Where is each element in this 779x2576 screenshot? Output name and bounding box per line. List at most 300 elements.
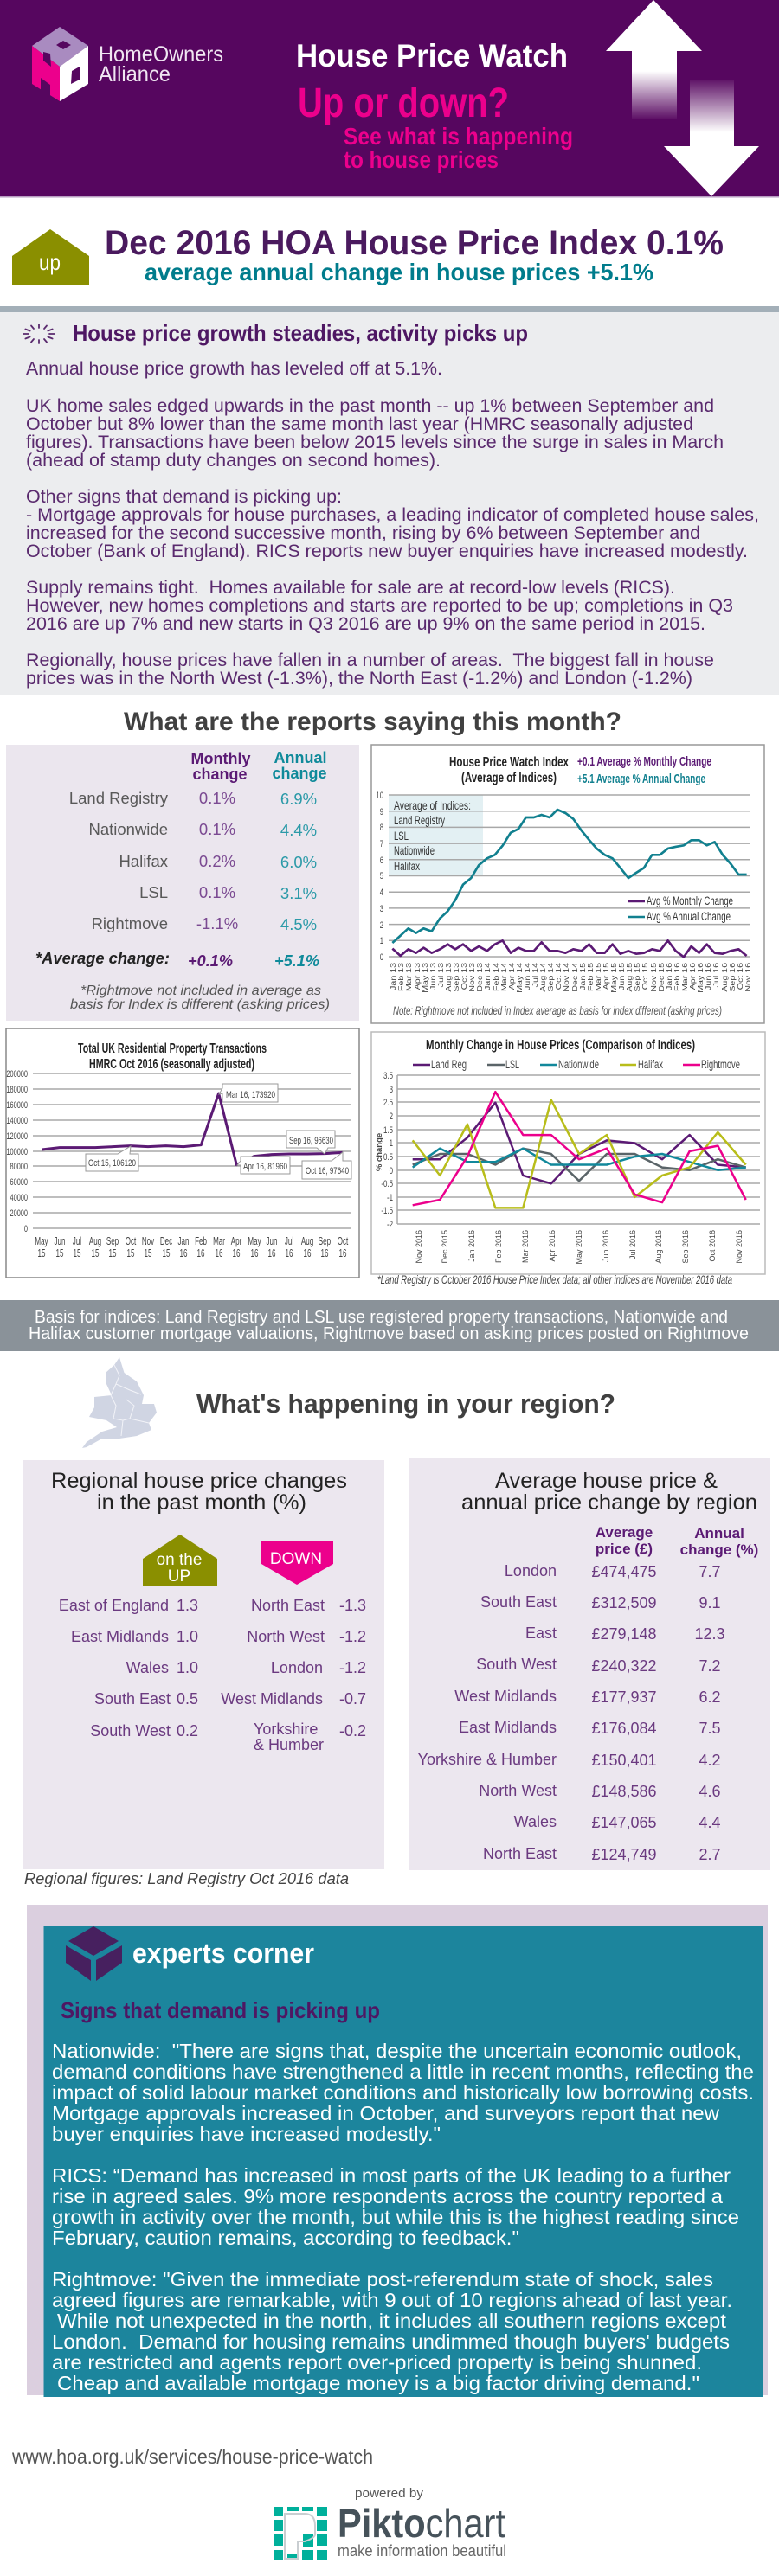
panel title: Average house price & xyxy=(495,1469,718,1493)
panel title xyxy=(51,1469,347,1515)
indices list: LSL xyxy=(394,829,409,843)
legend: Nationwide xyxy=(558,1058,599,1071)
indices list: Halifax xyxy=(394,859,420,873)
panel: summary xyxy=(0,312,779,695)
quote: Rightmove: Cheap and available mortgage money is a big factor driving demand." xyxy=(57,2372,699,2394)
x axis labels: Jul xyxy=(285,1235,293,1248)
x axis labels: Feb 2016 xyxy=(494,1230,503,1263)
chart title: House Price Watch Index xyxy=(449,755,569,770)
y axis title: % change xyxy=(375,1133,384,1171)
average prices: £124,749 xyxy=(591,1846,657,1863)
header banner xyxy=(0,0,779,197)
chart title xyxy=(449,755,569,785)
logo wordmark: HomeOwners xyxy=(99,42,223,67)
x axis labels: 15 xyxy=(163,1247,170,1260)
quote: RICS: growth in activity over the month, but while this is the highest reading since xyxy=(52,2206,739,2228)
x axis labels: 16 xyxy=(286,1247,293,1260)
banner subheading: to house prices xyxy=(344,146,499,173)
chart: House Price Watch Index xyxy=(371,745,764,1023)
y axis labels: 100000 xyxy=(6,1147,28,1157)
average row: *Average change: xyxy=(35,950,170,967)
callout: Mar 16: Mar 16, 173920 xyxy=(226,1090,275,1100)
x axis labels: Sep 2016 xyxy=(681,1230,690,1264)
average row xyxy=(35,950,319,970)
x axis labels: 15 xyxy=(145,1247,151,1260)
risers list: East of England xyxy=(59,1597,169,1614)
x axis labels xyxy=(35,1235,348,1260)
x axis labels: 15 xyxy=(38,1247,45,1260)
y axis labels: 120000 xyxy=(6,1131,28,1141)
logo wordmark xyxy=(99,42,223,87)
x axis labels: Jun 14 xyxy=(524,962,532,990)
x axis labels: Nov 2016 xyxy=(735,1230,744,1264)
headline index block xyxy=(12,224,724,285)
callout: Apr 16: Apr 16, 81960 xyxy=(243,1162,287,1172)
y axis labels: -0.5 xyxy=(381,1179,393,1189)
icon: up house: up xyxy=(39,249,61,275)
summary text: However, new homes completions and starts are reported to be up; completions in Q3 xyxy=(26,595,733,616)
band: basis for indices: Halifax customer mortgage valuations, Rightmove based on asking prices posted on Rightmove xyxy=(29,1323,749,1343)
x axis labels: Oct xyxy=(338,1235,348,1248)
y axis labels: 8 xyxy=(380,823,383,833)
arrow: down xyxy=(664,80,759,196)
y axis labels: 10 xyxy=(376,791,383,801)
legend: Land Reg xyxy=(431,1058,467,1071)
quote: Nationwide: Nationwide: "There are signs that, despite the uncertain economic outlook, xyxy=(52,2040,742,2062)
icon: HomeOwners Alliance logo cube xyxy=(32,27,88,101)
y axis labels: 4 xyxy=(380,888,383,898)
callout: Oct 15: Oct 15, 106120 xyxy=(88,1158,136,1169)
icon: up house xyxy=(12,229,89,285)
summary text: UK home sales edged upwards in the past month -- up 1% between September and xyxy=(26,395,714,416)
summary text: figures). Transactions have been below 2015 levels since the surge in sales in March xyxy=(26,432,724,452)
column headers: change (%) xyxy=(680,1541,758,1558)
callout: Apr 16 xyxy=(237,1157,290,1174)
x axis labels: May 16 xyxy=(697,963,705,993)
callout: Mar 16 xyxy=(219,1084,278,1102)
y axis labels: 200000 xyxy=(6,1069,28,1079)
y axis labels: -1 xyxy=(387,1193,393,1203)
banner title: House Price Watch xyxy=(296,38,568,74)
y axis labels: 3 xyxy=(380,904,383,914)
average row: +0.1% xyxy=(188,952,233,970)
x axis labels: May 13 xyxy=(422,963,430,993)
average row: +5.1% xyxy=(274,952,319,970)
y axis labels: 80000 xyxy=(10,1162,28,1171)
legend: Halifax xyxy=(638,1058,663,1071)
average prices xyxy=(591,1563,657,1863)
x axis labels: Sep 13 xyxy=(453,963,461,992)
x axis labels: 15 xyxy=(126,1247,134,1260)
annual changes: 12.3 xyxy=(694,1625,725,1643)
index title: Dec 2016 HOA House Price Index 0.1% xyxy=(105,224,724,262)
row labels: Rightmove xyxy=(92,914,168,932)
monthly values: 0.1% xyxy=(199,883,235,901)
x axis labels: Apr 14 xyxy=(508,962,517,990)
y axis labels: 60000 xyxy=(10,1177,28,1187)
panel title: in the past month (%) xyxy=(97,1490,306,1515)
x axis labels: Dec 14 xyxy=(571,962,580,992)
x axis labels: Aug xyxy=(301,1235,313,1248)
arrow: up xyxy=(606,0,702,119)
y axis labels: 0 xyxy=(380,952,383,963)
callout: Oct 16 xyxy=(302,1152,351,1179)
summary text: (ahead of stamp duty changes on second homes). xyxy=(26,450,441,471)
x axis labels: 15 xyxy=(73,1247,80,1260)
x axis labels: Nov 2016 xyxy=(415,1230,423,1264)
footer: Piktochart credit xyxy=(274,2486,506,2560)
x axis labels: Mar xyxy=(213,1235,225,1248)
average prices: £312,509 xyxy=(591,1594,657,1612)
icon: on the up house: on the xyxy=(157,1551,202,1569)
x axis labels: Aug xyxy=(89,1235,101,1248)
y axis labels xyxy=(6,1069,28,1234)
y axis labels: 2 xyxy=(380,920,383,931)
x axis labels: May xyxy=(35,1235,48,1248)
x axis labels: Aug 15 xyxy=(626,963,634,992)
x axis labels: Mar 16 xyxy=(681,963,690,991)
summary text: - Mortgage approvals for house purchases, a leading indicator of completed house sales, xyxy=(26,504,759,525)
quote: Nationwide: Mortgage approvals increased in October, and surveyors report that new xyxy=(52,2102,720,2124)
fallers list: -1.2 xyxy=(339,1628,366,1645)
fallers list xyxy=(221,1597,366,1753)
annual changes: 4.2 xyxy=(699,1752,721,1769)
y axis labels: 1 xyxy=(390,1138,393,1149)
annual change subtitle: average annual change in house prices +5.1% xyxy=(145,259,653,285)
region names: North West xyxy=(479,1782,557,1799)
risers list: Wales xyxy=(126,1659,169,1676)
section heading: reports: What are the reports saying this month? xyxy=(124,708,621,736)
risers list: East Midlands xyxy=(71,1628,169,1645)
x axis labels: 16 xyxy=(197,1247,204,1260)
experts heading: experts corner xyxy=(132,1938,314,1969)
x axis labels: Nov xyxy=(142,1235,155,1248)
fallers list: North East xyxy=(251,1597,325,1614)
x axis labels: Apr 2016 xyxy=(548,1230,557,1262)
column headers: Annual xyxy=(274,749,327,766)
x axis labels: Nov 14 xyxy=(563,962,571,992)
x axis labels: Oct 16 xyxy=(737,963,745,990)
x axis labels: Sep 14 xyxy=(547,962,556,992)
risers list: South West xyxy=(90,1722,171,1740)
x axis labels: Jan xyxy=(177,1235,189,1248)
chart: UK residential transactions xyxy=(6,1028,359,1278)
y axis labels: 0 xyxy=(24,1224,28,1234)
y axis labels: 1.5 xyxy=(383,1125,393,1136)
fallers list: & Humber xyxy=(254,1736,324,1753)
y axis labels: 2 xyxy=(390,1112,393,1122)
y axis labels: 9 xyxy=(380,807,383,817)
annual values: 6.0% xyxy=(280,853,317,871)
x axis labels: Jun xyxy=(267,1235,278,1248)
quote: Rightmove: are restricted and agents report over-priced property is being shunned. xyxy=(52,2351,702,2374)
callout: Sep 16: Sep 16, 96630 xyxy=(289,1136,333,1146)
x axis labels: Jun xyxy=(55,1235,65,1248)
fallers list: North West xyxy=(247,1628,325,1645)
risers list: 0.2 xyxy=(177,1722,198,1740)
column headers: Average xyxy=(596,1524,653,1541)
x axis labels: Dec xyxy=(160,1235,173,1248)
x axis labels: Mar 14 xyxy=(500,962,509,991)
x axis labels: Feb 15 xyxy=(587,963,596,991)
annual changes xyxy=(694,1563,725,1863)
band: basis for indices xyxy=(0,1300,779,1351)
icon: Piktochart logo xyxy=(274,2507,327,2560)
x axis labels: Dec 13 xyxy=(476,963,485,992)
y axis labels: 3.5 xyxy=(383,1071,393,1081)
chart headline values: +5.1 Average % Annual Change xyxy=(577,772,705,786)
annual values: 4.4% xyxy=(280,821,317,839)
fallers list: London xyxy=(271,1659,323,1676)
summary text: October (Bank of England). RICS reports new buyer enquiries have increased modestly. xyxy=(26,541,748,561)
quote: RICS: February, caution remains, according to feedback." xyxy=(52,2227,519,2249)
chart headline values xyxy=(577,755,711,786)
x axis labels: 16 xyxy=(233,1247,240,1260)
x axis labels: Oct xyxy=(126,1235,136,1248)
column headers: change xyxy=(192,766,248,783)
x axis labels: Jan 15 xyxy=(579,963,588,990)
region names xyxy=(418,1562,557,1862)
annual changes: 2.7 xyxy=(699,1846,721,1863)
column headers xyxy=(190,749,327,783)
risers list: 0.5 xyxy=(177,1690,198,1708)
fallers list: -0.7 xyxy=(339,1690,366,1708)
average prices: £148,586 xyxy=(591,1783,657,1800)
x axis labels: 16 xyxy=(216,1247,222,1260)
average prices: £147,065 xyxy=(591,1814,657,1831)
banner subheading: See what is happening xyxy=(344,123,573,150)
x axis labels: Jun 2016 xyxy=(602,1230,610,1262)
x axis labels: Jul xyxy=(73,1235,81,1248)
x axis labels: Oct 2016 xyxy=(708,1230,717,1262)
x axis labels: Oct 13 xyxy=(460,963,469,990)
fallers list: -1.2 xyxy=(339,1659,366,1676)
region names: East xyxy=(525,1624,557,1642)
quote: RICS: rise in agreed sales. 9% more respondents across the country reported a xyxy=(52,2185,724,2208)
annual values: 6.9% xyxy=(280,790,317,808)
Piktochart wordmark: Piktochart xyxy=(338,2501,505,2546)
x axis labels: 16 xyxy=(304,1247,311,1260)
x axis labels: Sep 15 xyxy=(634,963,642,992)
monthly change line xyxy=(392,940,747,957)
row labels: LSL xyxy=(139,883,168,901)
quote: Rightmove: Rightmove: "Given the immediate post-referendum state of shock, sales xyxy=(52,2268,713,2291)
x axis labels: 15 xyxy=(56,1247,63,1260)
x axis labels: 16 xyxy=(180,1247,187,1260)
x axis labels: Apr 15 xyxy=(602,963,611,990)
quote: Rightmove xyxy=(52,2268,732,2394)
row labels xyxy=(69,789,169,932)
x axis labels: Oct 15 xyxy=(641,963,650,990)
monthly values: 0.1% xyxy=(199,820,235,838)
risers list: 1.0 xyxy=(177,1659,198,1676)
summary text: October but 8% lower than the same month last year (HMRC seasonally adjusted xyxy=(26,413,693,434)
x axis labels: Aug 14 xyxy=(539,962,548,992)
region names: South West xyxy=(476,1656,557,1673)
x axis labels: Jul 2016 xyxy=(628,1230,637,1259)
y axis labels: -1.5 xyxy=(381,1206,393,1216)
summary text: increased for the second successive month, rising by 6% between September and xyxy=(26,522,700,543)
indices list: Average of Indices: xyxy=(394,798,471,812)
y axis labels: 180000 xyxy=(6,1085,28,1094)
risers list: South East xyxy=(94,1690,171,1708)
y axis labels: 1 xyxy=(380,936,383,946)
y axis labels: 6 xyxy=(380,855,383,866)
x axis labels: 16 xyxy=(339,1247,346,1260)
x axis labels: Oct 14 xyxy=(555,962,563,990)
summary text: prices was in the North West (-1.3%), the North East (-1.2%) and London (-1.2%) xyxy=(26,668,692,689)
legend xyxy=(628,894,733,923)
panel: index table xyxy=(6,745,359,1021)
summary text: Supply remains tight. Homes available for sale are at record-low levels (RICS). xyxy=(26,577,675,598)
summary text: 2016 are up 7% and new starts in Q3 2016 are up 9% on the same period in 2015. xyxy=(26,613,705,634)
regional data source: Regional figures: Land Registry Oct 2016 data xyxy=(24,1870,349,1887)
icon: down house: DOWN xyxy=(270,1550,322,1568)
quote: Nationwide: buyer enquiries have increased modestly." xyxy=(52,2123,441,2145)
y axis labels: -2 xyxy=(387,1220,393,1230)
annual changes: 9.1 xyxy=(699,1594,721,1612)
banner headline: Up or down? xyxy=(298,80,509,126)
x axis labels xyxy=(415,1230,744,1265)
legend: Rightmove xyxy=(701,1058,740,1071)
experts subheading: Signs that demand is picking up xyxy=(61,1997,380,2023)
logo wordmark: Alliance xyxy=(99,62,171,87)
quote: Rightmove: London. Demand for housing remains undimmed though buyers' budgets xyxy=(52,2330,730,2353)
y axis labels: 0 xyxy=(390,1166,393,1176)
region names: Yorkshire & Humber xyxy=(418,1751,557,1768)
x axis labels: Nov 15 xyxy=(650,963,659,992)
x axis labels: Dec 15 xyxy=(658,963,666,992)
table footnote: *Rightmove not included in average as xyxy=(80,984,321,998)
row labels: Land Registry xyxy=(69,789,169,807)
y axis labels: 2.5 xyxy=(383,1098,393,1108)
column headers: Annual xyxy=(694,1525,744,1541)
risers list: 1.0 xyxy=(177,1628,198,1645)
website url: www.hoa.org.uk/services/house-price-watch xyxy=(11,2445,373,2468)
annual change line xyxy=(392,810,747,943)
y axis labels: 20000 xyxy=(10,1208,28,1218)
fallers list: Yorkshire xyxy=(254,1721,318,1738)
annual values: 3.1% xyxy=(280,884,317,902)
annual changes: 7.5 xyxy=(699,1720,721,1737)
region names: London xyxy=(505,1562,557,1580)
band: basis for indices: Basis for indices: Land Registry and LSL use registered property transactions, Nationwide and xyxy=(35,1307,728,1327)
icon: spinner xyxy=(23,324,55,343)
panel: average house price by region xyxy=(409,1458,770,1870)
x axis labels: Jul 14 xyxy=(531,962,540,987)
indices list: Nationwide xyxy=(394,843,435,857)
x axis labels: Apr 16 xyxy=(689,963,698,990)
y axis labels: 140000 xyxy=(6,1116,28,1125)
column headers: price (£) xyxy=(596,1541,653,1557)
fallers list: -1.3 xyxy=(339,1597,366,1614)
quote: Nationwide: impact of solid labour market conditions and historically low borrowing costs. xyxy=(52,2081,754,2104)
summary text: Other signs that demand is picking up: xyxy=(26,486,342,507)
line: LSL xyxy=(413,1149,746,1181)
x axis labels: Dec 2015 xyxy=(441,1230,449,1264)
annual values xyxy=(280,790,317,933)
line: Nationwide xyxy=(413,1149,746,1170)
summary text xyxy=(26,358,759,689)
summary text: Regionally, house prices have fallen in a number of areas. The biggest fall in house xyxy=(26,650,714,670)
legend xyxy=(413,1058,740,1071)
x axis labels xyxy=(390,962,753,993)
Piktochart tagline: make information beautiful xyxy=(338,2542,506,2560)
icon: cube xyxy=(66,1926,122,1981)
quote: Nationwide xyxy=(52,2040,754,2145)
x axis labels: Jun 13 xyxy=(429,963,438,990)
panel: regional price changes xyxy=(23,1460,384,1869)
monthly values: 0.2% xyxy=(199,852,235,870)
region names: West Midlands xyxy=(454,1688,557,1705)
line: Land Reg xyxy=(413,1103,746,1183)
monthly values: 0.1% xyxy=(199,789,235,807)
x axis labels: Aug 2016 xyxy=(654,1230,663,1264)
y axis labels: 5 xyxy=(380,871,383,881)
average prices: £176,084 xyxy=(591,1720,657,1737)
icon: on the up house: UP xyxy=(168,1567,190,1586)
panel title: Regional house price changes xyxy=(51,1469,347,1493)
region names: Wales xyxy=(514,1813,557,1830)
x axis labels: Aug 13 xyxy=(445,963,454,992)
icon: down house xyxy=(261,1541,333,1585)
legend: LSL xyxy=(505,1058,519,1071)
legend: Avg % Monthly Change xyxy=(647,894,733,907)
chart title xyxy=(78,1041,267,1072)
y axis labels: 3 xyxy=(390,1085,393,1095)
column headers xyxy=(596,1524,758,1558)
x axis labels: Aug 16 xyxy=(721,963,730,992)
callout: Sep 16 xyxy=(286,1131,335,1154)
x axis labels: Jan 13 xyxy=(390,963,398,990)
x axis labels: Mar 2016 xyxy=(521,1230,530,1263)
x axis labels: Feb 14 xyxy=(493,962,501,991)
x axis labels: Feb xyxy=(195,1235,207,1248)
quote: Rightmove: agreed figures are remarkable, with 9 out of 10 regions ahead of last year. xyxy=(52,2289,732,2311)
chart headline values: +0.1 Average % Monthly Change xyxy=(577,755,711,769)
x axis labels: Sep xyxy=(106,1235,119,1248)
panel title: annual price change by region xyxy=(461,1490,757,1515)
banner subheading xyxy=(344,123,573,173)
y axis labels: 0.5 xyxy=(383,1152,393,1163)
quote: Rightmove: While not unexpected in the north, it includes all southern regions except xyxy=(57,2310,726,2332)
fallers list: -0.2 xyxy=(339,1722,366,1740)
x axis labels: 16 xyxy=(268,1247,276,1260)
x axis labels: 16 xyxy=(251,1247,258,1260)
x axis labels: Jan 16 xyxy=(666,963,674,990)
table footnote xyxy=(70,984,330,1012)
column headers: change xyxy=(272,765,327,782)
average prices: £150,401 xyxy=(591,1752,657,1769)
x axis labels: May 14 xyxy=(516,962,525,993)
annual changes: 6.2 xyxy=(699,1688,721,1706)
risers list xyxy=(59,1597,198,1740)
x axis labels: Jun 15 xyxy=(618,963,627,990)
chart title: (Average of Indices) xyxy=(461,771,557,785)
quote: RICS xyxy=(52,2164,739,2249)
y axis labels xyxy=(381,1071,393,1230)
annual changes: 7.7 xyxy=(699,1563,721,1580)
chart: monthly change comparison xyxy=(371,1032,765,1274)
x axis labels: Apr 13 xyxy=(414,963,422,990)
x axis labels: 15 xyxy=(109,1247,116,1260)
average prices: £240,322 xyxy=(591,1657,657,1675)
x axis labels: Mar 15 xyxy=(595,963,603,991)
indices list xyxy=(394,798,471,873)
average prices: £177,937 xyxy=(591,1688,657,1706)
x axis labels: Jan 14 xyxy=(484,962,493,990)
column headers: Monthly xyxy=(190,750,251,767)
